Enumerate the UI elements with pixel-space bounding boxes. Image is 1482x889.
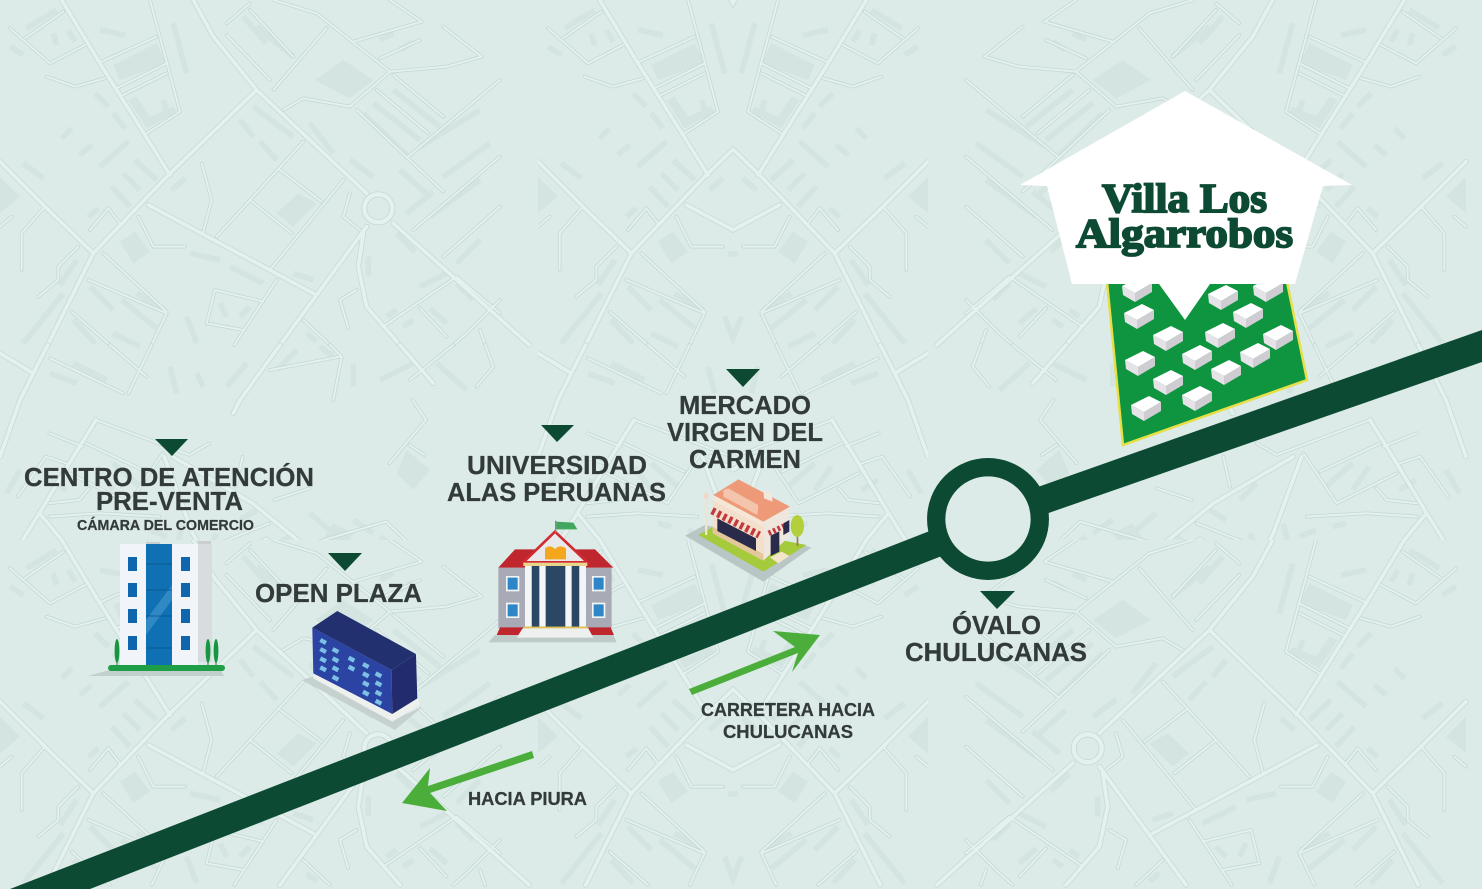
label: Universidad Alas Peruanas (447, 452, 666, 507)
label: Óvalo Chulucanas (905, 610, 1087, 667)
label: Open Plaza: OPEN PLAZA (255, 580, 422, 608)
label: Universidad Alas Peruanas: ALAS PERUANAS (447, 479, 666, 507)
label: Centro de Atención Pre-Venta: CÁMARA DEL COMERCIO (77, 517, 254, 534)
title: Villa Los Algarrobos (1076, 175, 1293, 256)
label: Carretera hacia Chulucanas: CARRETERA HACIA (701, 700, 875, 720)
marker: Open Plaza (328, 553, 362, 571)
icon: Open Plaza building (302, 611, 423, 730)
label: Carretera hacia Chulucanas: CHULUCANAS (723, 722, 853, 742)
label: Universidad Alas Peruanas: UNIVERSIDAD (467, 452, 647, 480)
title: Villa Los Algarrobos: Algarrobos (1076, 210, 1293, 256)
label: Mercado Virgen del Carmen: CARMEN (689, 446, 801, 474)
icon: market building (685, 479, 812, 582)
marker: Mercado (726, 369, 760, 387)
label: Carretera hacia Chulucanas (701, 700, 875, 742)
arrow: toward Chulucanas (689, 631, 820, 695)
label: Mercado Virgen del Carmen: VIRGEN DEL (667, 419, 823, 447)
label: Mercado Virgen del Carmen: MERCADO (679, 392, 811, 420)
roundabout: Óvalo Chulucanas (936, 467, 1040, 571)
project lot: Villa Los Algarrobos (1107, 277, 1307, 445)
main road (10, 330, 1482, 889)
label: Hacia Piura: HACIA PIURA (468, 789, 587, 809)
label: Óvalo Chulucanas: CHULUCANAS (905, 639, 1087, 667)
label: Mercado Virgen del Carmen (667, 392, 823, 474)
label: Centro de Atención Pre-Venta: PRE-VENTA (96, 488, 243, 516)
icon: office building (88, 541, 225, 676)
label: Óvalo Chulucanas: ÓVALO (952, 610, 1041, 640)
label: Centro de Atención Pre-Venta (24, 462, 314, 534)
marker: Universidad (541, 425, 574, 442)
marker: Centro de Atención (155, 439, 188, 456)
icon: university building (488, 521, 617, 642)
marker: Óvalo (980, 591, 1015, 609)
title: Villa Los Algarrobos: Villa Los (1102, 175, 1267, 221)
arrow: toward Piura (402, 751, 534, 811)
house-shaped sign (1020, 91, 1352, 320)
label: Centro de Atención Pre-Venta: CENTRO DE ATENCIÓN (24, 462, 314, 492)
